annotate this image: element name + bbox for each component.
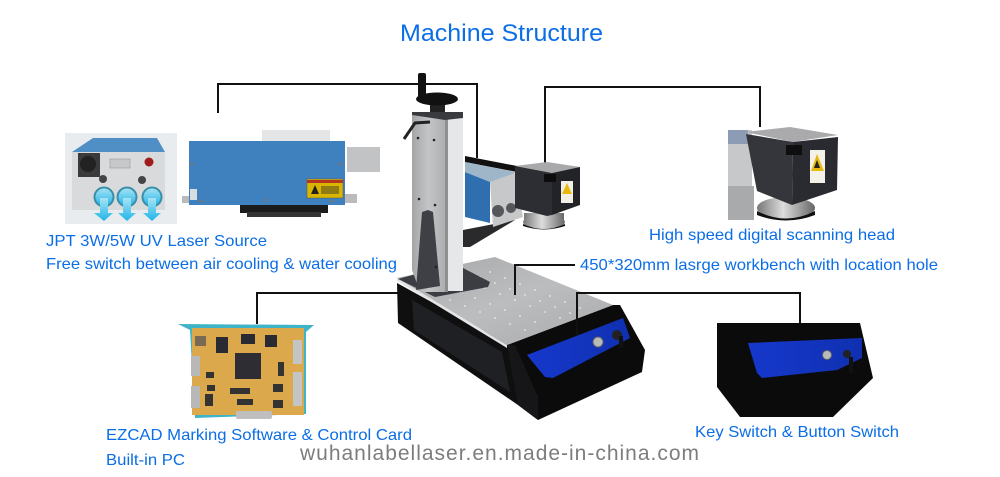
text: control card: EZCAD Marking Software & Control Card (106, 427, 412, 444)
icon: scanning head close-up (728, 127, 838, 220)
watermark: wuhanlabellaser.en.made-in-china.com (299, 442, 699, 465)
icon: laser source side view (182, 130, 380, 217)
arm bracket (463, 220, 515, 247)
text: laser source: Free switch between air cooling & water cooling (46, 256, 397, 273)
connector: scanning head (545, 87, 760, 165)
text: control card: Built-in PC (106, 452, 185, 469)
connector: laser source (218, 84, 477, 158)
handwheel (416, 73, 458, 112)
icon: control card (178, 324, 314, 419)
column foot (398, 268, 490, 297)
connector: control card (257, 293, 398, 324)
text: laser source (46, 233, 397, 273)
text: key switch: Key Switch & Button Switch (695, 424, 899, 441)
text: control card (106, 427, 412, 469)
text: scanning head: High speed digital scanning head (649, 227, 895, 244)
connector: key switch (577, 293, 800, 335)
laser warning label (307, 179, 343, 198)
title: Machine Structure (400, 20, 603, 47)
worktable plate (397, 257, 613, 348)
control panel (527, 318, 630, 378)
text: laser source: JPT 3W/5W UV Laser Source (46, 233, 267, 250)
main machine (397, 73, 645, 420)
icon: key switch box (717, 323, 873, 417)
text: workbench: 450*320mm lasrge workbench with location hole (580, 257, 938, 274)
clamp lever (404, 122, 430, 139)
laser on arm (465, 156, 523, 227)
scanning head (515, 162, 580, 230)
icon: laser source rear view (65, 133, 177, 224)
machine base body (397, 283, 645, 420)
connector: workbench (515, 265, 575, 295)
icon: cooling arrows (94, 188, 162, 221)
column (412, 112, 463, 292)
